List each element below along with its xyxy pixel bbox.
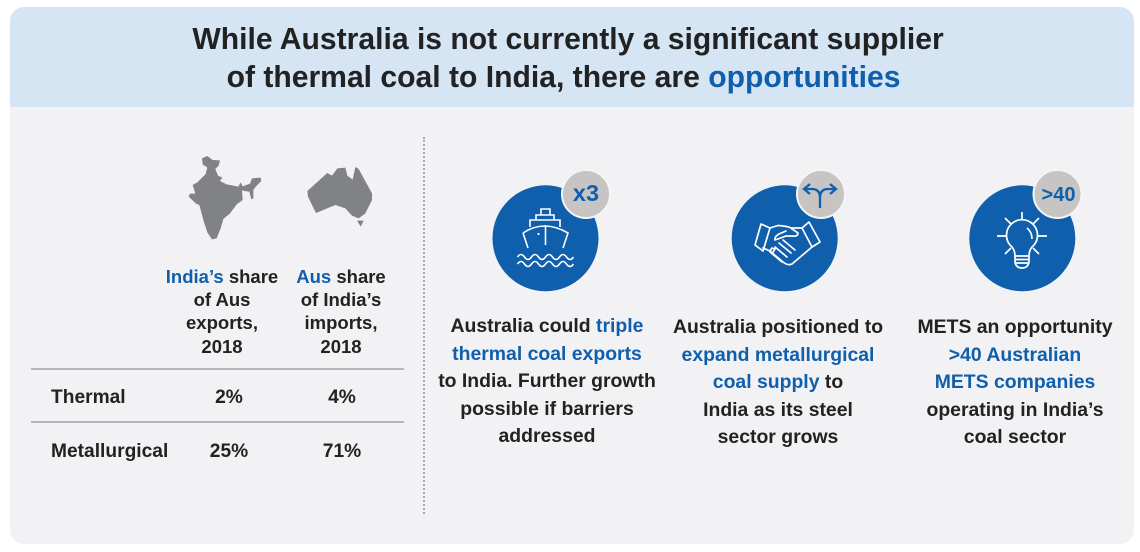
column header: India's share: 2018 xyxy=(201,336,243,357)
text: expand metallurgical coal supply: India as its steel xyxy=(703,398,853,420)
text: METS opportunity: coal sector xyxy=(964,426,1066,448)
column header: India's share xyxy=(166,266,278,357)
column header: Aus share: of India’s xyxy=(301,289,381,310)
title xyxy=(192,23,944,94)
title: of thermal coal to India, there are opportunities xyxy=(227,61,900,94)
text: expand metallurgical coal supply xyxy=(673,316,883,448)
column header: India's share: exports, xyxy=(186,312,258,333)
title banner xyxy=(10,7,1134,107)
text: expand metallurgical coal supply: expand metallurgical xyxy=(682,344,874,366)
column header: Aus share: imports, xyxy=(304,312,377,333)
row: Metallurgical: Metallurgical xyxy=(51,441,168,462)
icon: light bulb with >40 badge xyxy=(969,171,1080,292)
icon: India map xyxy=(188,156,372,240)
text: triple thermal coal exports: to India. Further growth xyxy=(438,370,656,392)
text: triple thermal coal exports: possible if barriers xyxy=(460,398,634,420)
text: METS opportunity xyxy=(918,316,1112,448)
text: expand metallurgical coal supply: Australia positioned to xyxy=(673,316,883,338)
column header: India's share: of Aus xyxy=(194,289,250,310)
text: METS opportunity: METS an opportunity xyxy=(918,316,1112,338)
row: Metallurgical: 71% xyxy=(323,441,361,462)
text: expand metallurgical coal supply: sector grows xyxy=(718,426,838,448)
table rule top xyxy=(31,368,404,370)
icon: ship with x3 badge: x3 xyxy=(573,180,599,206)
icon: ship with x3 badge xyxy=(492,171,609,292)
row: Thermal: 4% xyxy=(328,387,356,408)
row: Thermal xyxy=(51,387,356,408)
icon: handshake with fork arrow badge xyxy=(732,171,844,292)
text: triple thermal coal exports: thermal coal exports xyxy=(452,342,642,364)
text: METS opportunity: >40 Australian xyxy=(949,344,1081,366)
row: Metallurgical: 25% xyxy=(210,441,248,462)
text: expand metallurgical coal supply: coal supply to xyxy=(713,371,843,393)
column header: Aus share xyxy=(296,266,386,357)
row: Thermal: Thermal xyxy=(51,387,126,408)
icon: light bulb with >40 badge: >40 xyxy=(1042,184,1075,206)
row: Thermal: 2% xyxy=(215,387,243,408)
column header: Aus share: 2018 xyxy=(320,336,362,357)
text: METS opportunity: operating in India’s xyxy=(926,398,1104,420)
dotted divider xyxy=(423,137,425,514)
text: triple thermal coal exports: addressed xyxy=(498,425,596,447)
title: While Australia is not currently a significant supplier xyxy=(192,23,944,56)
column header: Aus share: Aus share xyxy=(296,266,386,287)
text: triple thermal coal exports xyxy=(438,315,656,447)
column header: India's share: India’s share xyxy=(166,266,278,287)
table rule middle xyxy=(31,421,404,423)
row: Metallurgical xyxy=(51,441,361,462)
text: METS opportunity: METS companies xyxy=(935,371,1095,393)
text: triple thermal coal exports: Australia could triple xyxy=(451,315,643,337)
